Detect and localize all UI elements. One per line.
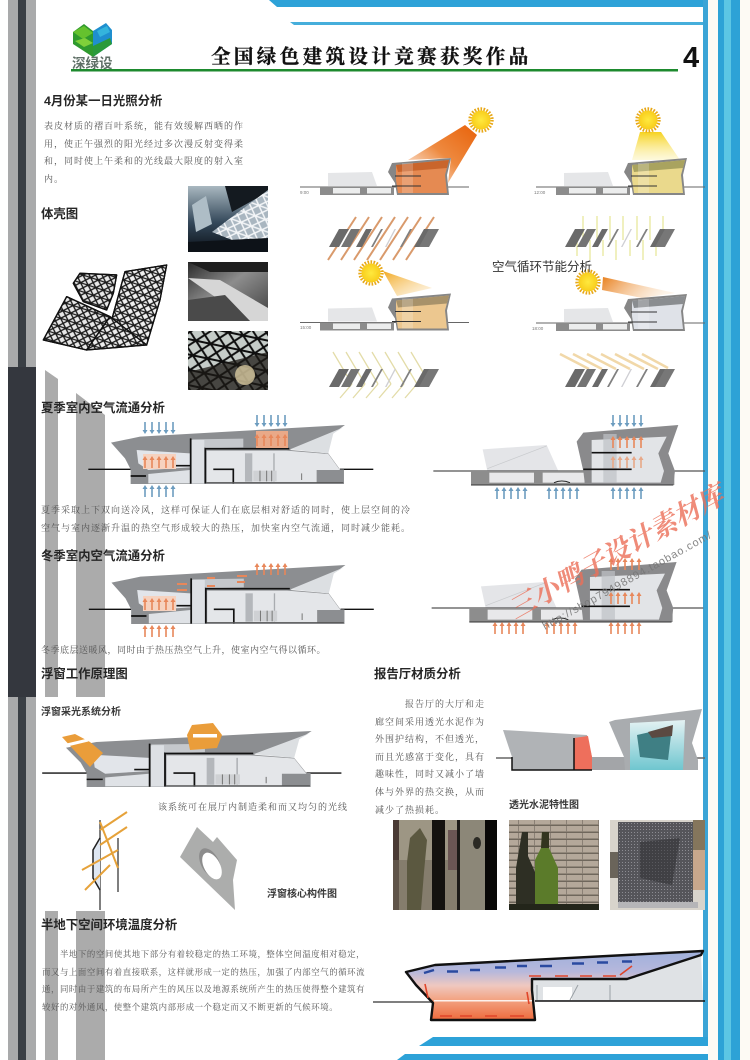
text: sunlight description: 表皮材质的褶百叶系统，能有效缓解西晒的作 xyxy=(44,120,244,132)
page number: 4 xyxy=(683,42,699,74)
bottom blue band upper xyxy=(419,1037,708,1046)
louver diagram: reflected tan rays xyxy=(329,352,439,398)
watermark: red store name: 三小鸭子设计素材库 xyxy=(503,477,734,625)
text: semi-underground description: 半地下的空间使其地下部分有着较稳定的热工环境，整体空间温度相对稳定， xyxy=(60,949,365,960)
label: core component: 浮窗核心构件图 xyxy=(267,887,337,900)
text: auditorium description: 报告厅的大厅和走 xyxy=(405,698,485,709)
text: auditorium description: 体与外界的热交换，从而 xyxy=(375,786,485,798)
text: auditorium description: 而且光感富于变化，具有 xyxy=(375,751,485,763)
text: sunlight description xyxy=(44,120,244,184)
heading: shell diagram: 体壳图 xyxy=(41,206,78,221)
text: auditorium description: 趣味性，同时又减小了墙 xyxy=(375,768,485,780)
text: auditorium description: 外围护结构，不但透光， xyxy=(375,733,485,745)
photo: silhouette behind concrete xyxy=(393,820,497,910)
section: winter right xyxy=(432,558,703,634)
photo: perforated panel xyxy=(610,820,705,910)
sun diagram: evening grey: 18:00 xyxy=(532,326,544,331)
text: sunlight description: 内。 xyxy=(44,173,64,184)
logo xyxy=(72,23,113,71)
text: auditorium description: 廊空间采用透光水泥作为 xyxy=(375,716,485,727)
top blue line xyxy=(290,22,703,25)
photo: bottles shadow xyxy=(509,820,599,910)
sun diagram: afternoon amber: 15:00 xyxy=(300,325,312,330)
text: summer description: 空气与室内逐渐升温的热空气形成较大的热压，加快室内空气流通，同时减少能耗。 xyxy=(41,522,411,534)
text: system caption: 该系统可在展厅内制造柔和而又均匀的光线 xyxy=(158,801,348,812)
text: sunlight description: 用，使正午强烈的阳光经过多次漫反射变得柔 xyxy=(44,138,244,150)
louver diagram: chevron rays xyxy=(560,354,675,387)
text: sunlight description: 和，同时使上午柔和的光线最大限度的射入室 xyxy=(44,155,244,167)
label: air circulation analysis: 空气循环节能分析 xyxy=(492,259,592,274)
photo: skylight lattice xyxy=(188,331,268,390)
icon: green and blue cube mark xyxy=(73,23,112,57)
sun diagram: morning orange: 9:00 xyxy=(300,190,309,195)
heading: summer airflow: 夏季室内空气流通分析 xyxy=(41,400,165,415)
heading: sunlight analysis: 4月份某一日光照分析 xyxy=(44,93,162,108)
text: summer description: 夏季采取上下双向送冷风，这样可保证人们在底层相对舒适的同时，使上层空间的冷 xyxy=(41,504,411,516)
text: summer description xyxy=(41,504,411,534)
text: semi-underground description xyxy=(42,949,365,1013)
section: underground temperature xyxy=(373,951,705,1020)
sun diagram: evening grey xyxy=(532,271,705,331)
text: semi-underground description: 较好的对外通风，使整个建筑内部形成一个稳定而又不断更新的气候环境。 xyxy=(42,1002,338,1013)
text: semi-underground description: 而又与上面空间有着直接联系，这样就形成一定的热压，加强了内部空气的循环流 xyxy=(42,967,365,978)
heading: auditorium materials: 报告厅材质分析 xyxy=(374,666,461,681)
label: concrete properties: 透光水泥特性图 xyxy=(509,798,579,811)
title: 全国绿色建筑设计竞赛获奖作品 xyxy=(211,45,532,68)
right margin tint xyxy=(708,0,750,1060)
grey accent bars xyxy=(45,370,105,1060)
text: winter description: 冬季底层送暖风，同时由于热压热空气上升，使室内空气得以循环。 xyxy=(41,644,326,656)
text: semi-underground description: 通，同时由于建筑的布局所产生的风压以及地源系统所产生的热压使得整个建筑有 xyxy=(42,984,365,995)
heading: winter airflow: 冬季室内空气流通分析 xyxy=(41,548,165,563)
top blue band xyxy=(269,0,703,7)
heading: semi-underground: 半地下空间环境温度分析 xyxy=(41,917,177,932)
text: auditorium description: 减少了热损耗。 xyxy=(375,804,445,815)
subheading: daylight system: 浮窗采光系统分析 xyxy=(41,705,121,718)
title rule xyxy=(71,69,678,72)
sun diagram: noon yellow: 12:00 xyxy=(534,190,546,195)
left sidebar stripes xyxy=(8,0,36,1060)
sun diagram: afternoon amber xyxy=(300,262,469,330)
section: summer left xyxy=(88,415,373,497)
section: summer right xyxy=(433,415,705,499)
section: floating window daylight xyxy=(42,723,341,787)
louver diagram: vertical yellow rays xyxy=(565,216,675,260)
section: winter left xyxy=(89,563,374,637)
bottom blue band lower xyxy=(397,1054,708,1060)
louver diagram: orange rays xyxy=(328,217,439,260)
text: auditorium description xyxy=(375,698,485,815)
right sidebar stripes xyxy=(703,0,740,1060)
shell lattice model xyxy=(43,265,167,350)
watermark: store url: http://shop79498894.taobao.com/ xyxy=(541,529,714,633)
sun diagram: morning orange xyxy=(300,109,492,195)
sun diagram: noon yellow xyxy=(534,109,705,195)
photo: lattice interior xyxy=(188,186,268,252)
detail: window light rays xyxy=(82,812,127,910)
photo: greyscale structure xyxy=(188,262,268,321)
heading: floating window: 浮窗工作原理图 xyxy=(41,666,128,681)
section: translucent concrete xyxy=(496,709,705,770)
detail: core component xyxy=(180,827,237,910)
logo text: 深绿设 xyxy=(72,56,113,71)
